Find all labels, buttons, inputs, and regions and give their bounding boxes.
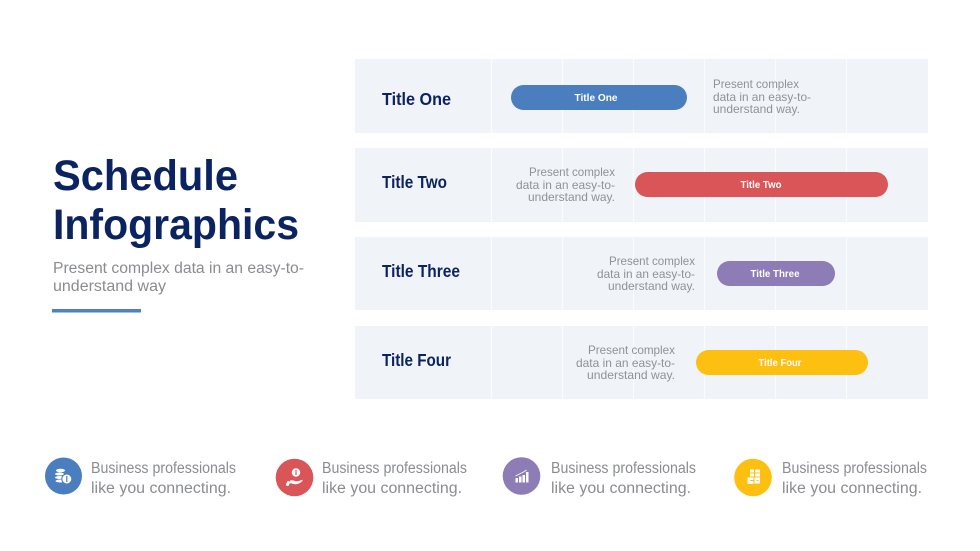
- legend text four: Business professionals: [782, 460, 927, 477]
- title: Infographics: [53, 201, 299, 249]
- panel: schedule row three: [355, 237, 928, 310]
- icon: hand with coin: [276, 459, 313, 496]
- legend text two: [322, 460, 467, 497]
- accent line: [52, 309, 141, 312]
- icon: coins: [45, 458, 82, 494]
- description: row two: [516, 165, 615, 204]
- description: row three: Present complex: [609, 254, 695, 268]
- legend text two: like you connecting.: [322, 480, 462, 497]
- subtitle text: [53, 260, 304, 295]
- description: row three: [597, 254, 695, 293]
- bar: Title Three: Title Three: [750, 268, 800, 280]
- icon: boxes: [734, 459, 772, 496]
- row heading: Title Four: Title Four: [382, 350, 451, 370]
- legend text one: like you connecting.: [91, 480, 231, 497]
- legend text three: like you connecting.: [551, 480, 691, 497]
- description: row two: Present complex: [529, 165, 615, 179]
- panel: schedule row two: [355, 148, 928, 222]
- bar: Title Three: [717, 261, 835, 286]
- legend text four: [782, 460, 927, 497]
- description: row one: data in an easy-to-: [713, 90, 811, 104]
- legend text three: Business professionals: [551, 460, 696, 477]
- description: row four: Present complex: [588, 343, 675, 357]
- legend item three: [503, 457, 696, 497]
- legend item one: [45, 458, 236, 497]
- subtitle text: Present complex data in an easy-to-: [53, 260, 304, 277]
- panel: schedule row one: [355, 59, 928, 133]
- legend item two: [276, 459, 467, 497]
- description: row four: understand way.: [587, 368, 675, 382]
- bar: Title One: [511, 85, 687, 110]
- bar: Title Four: Title Four: [758, 357, 802, 369]
- legend text two: Business professionals: [322, 460, 467, 477]
- panel: schedule row four: [355, 326, 928, 399]
- legend text three: [551, 460, 696, 497]
- title: Schedule: [53, 152, 238, 200]
- legend text one: Business professionals: [91, 460, 236, 477]
- description: row one: Present complex: [713, 77, 799, 91]
- bar: Title Two: Title Two: [740, 179, 782, 191]
- subtitle text: understand way: [53, 278, 166, 295]
- legend text one: [91, 460, 236, 497]
- bar: Title Two: [635, 172, 888, 197]
- bar: Title Four: [696, 350, 868, 375]
- description: row four: [576, 343, 675, 382]
- row heading: Title Three: Title Three: [382, 261, 460, 281]
- row heading: Title One: Title One: [382, 89, 451, 109]
- description: row two: data in an easy-to-: [516, 178, 615, 192]
- description: row two: understand way.: [528, 190, 615, 204]
- description: row four: data in an easy-to-: [576, 356, 675, 370]
- title: [53, 152, 299, 249]
- description: row one: [713, 77, 811, 116]
- legend item four: [734, 459, 927, 497]
- icon: growth bar chart: [503, 457, 540, 495]
- bar: Title One: Title One: [574, 92, 618, 104]
- description: row three: data in an easy-to-: [597, 267, 695, 281]
- row heading: Title Two: Title Two: [382, 172, 447, 192]
- description: row three: understand way.: [608, 279, 695, 293]
- legend text four: like you connecting.: [782, 480, 922, 497]
- description: row one: understand way.: [713, 102, 800, 116]
